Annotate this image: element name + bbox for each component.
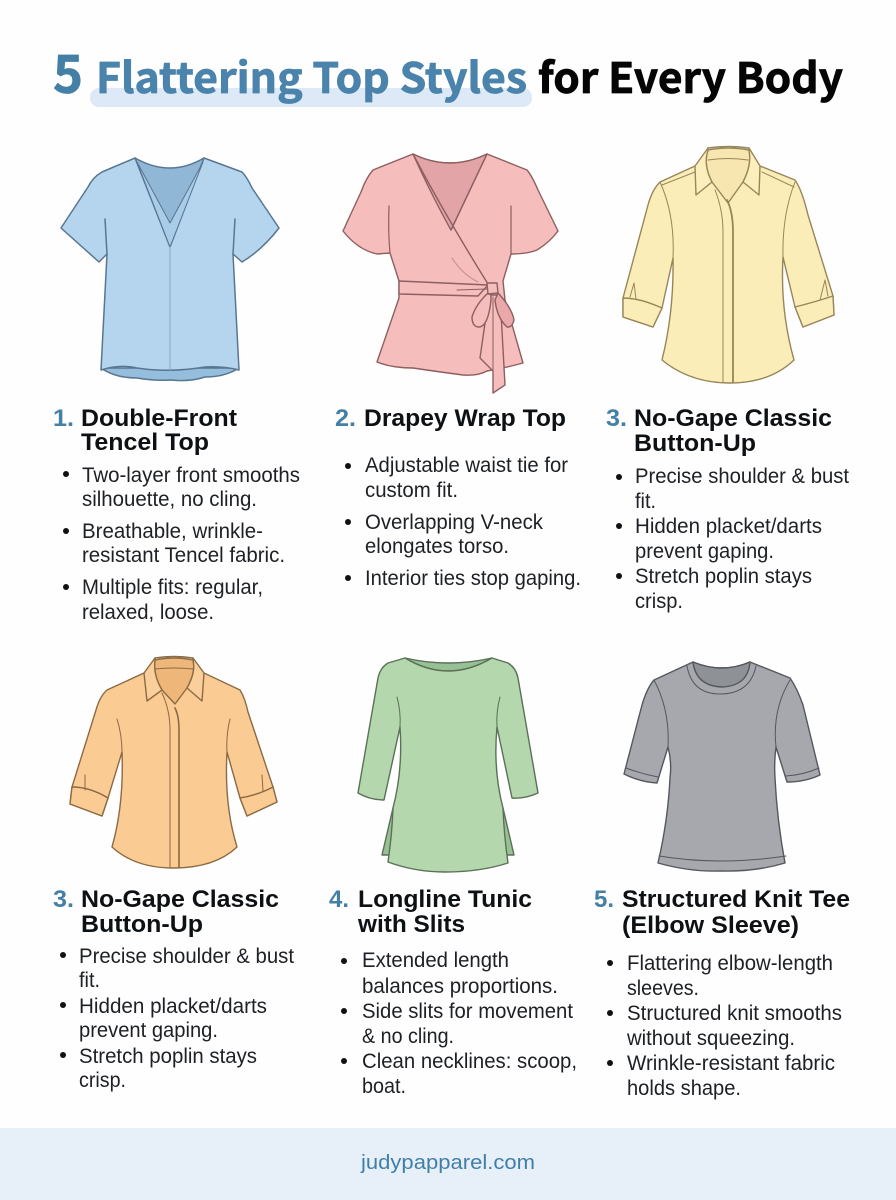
heading 4 [329,886,532,938]
bullet list 3 repeat: Hidden placket/darts [79,995,267,1018]
bullet list 2: Overlapping V-neck [365,511,543,534]
bullet list 4: balances proportions. [362,975,558,998]
bullet list 1 [63,464,300,624]
bullet list 5 [607,952,842,1100]
bullet list 2: Interior ties stop gaping. [365,567,581,590]
bullet list 4: boat. [362,1075,406,1098]
heading 1: Double-Front [81,405,237,432]
title black text: for Every Body [538,45,843,106]
heading 5: (Elbow Sleeve) [622,912,799,939]
bullet list 5: Wrinkle-resistant fabric [627,1052,835,1075]
bullet list 3: crisp. [635,590,683,613]
title number: 5 [53,33,83,109]
bullet list 2 [345,454,581,590]
bullet list 3 repeat: Stretch poplin stays [79,1045,257,1068]
title [53,33,843,109]
illustration: orange button-up shirt [70,656,277,868]
bullet list 1: resistant Tencel fabric. [82,544,285,567]
illustration: pink wrap top [343,154,558,393]
illustration: yellow button-up shirt [623,146,834,383]
heading 4: Longline Tunic [358,886,532,913]
heading 5: 5. [594,886,614,913]
bullet list 2: Adjustable waist tie for [365,454,568,477]
bullet list 1: Two-layer front smooths [82,464,300,487]
bullet list 3: Stretch poplin stays [635,565,812,588]
illustration: green tunic [358,658,538,872]
panel: longline tunic with slits [329,658,577,1098]
heading 3 repeat [53,886,279,938]
bullet list 4: Clean necklines: scoop, [362,1050,577,1073]
bullet list 3 repeat: fit. [79,969,100,992]
bullet list 3 repeat: Precise shoulder & bust [79,945,294,968]
bullet list 5: sleeves. [627,977,699,1000]
heading 2: 2. [335,405,356,432]
bullet list 3: Hidden placket/darts [635,515,822,538]
heading 3: 3. [606,405,627,432]
heading 3: Button-Up [634,430,756,457]
panel: structured knit tee [594,662,850,1100]
heading 2: Drapey Wrap Top [364,405,566,432]
illustration: blue v-neck top [61,158,279,381]
bullet list 1: Breathable, wrinkle- [82,520,263,543]
bullet list 4 [341,949,577,1098]
panel: double-front tencel top [53,158,300,624]
footer band [0,1128,896,1200]
bullet list 3: Precise shoulder & bust [635,465,849,488]
panel: no-gape classic button-up (bottom row) [53,656,294,1092]
heading 4: with Slits [357,911,465,938]
bullet list 5: without squeezing. [626,1027,795,1050]
bullet list 5: holds shape. [627,1077,741,1100]
bullet list 1: Multiple fits: regular, [82,576,263,599]
bullet list 3: fit. [635,490,656,513]
bullet list 4: Extended length [362,949,509,972]
bullet list 5: Flattering elbow-length [627,952,833,975]
heading 3 [606,405,832,457]
bullet list 2: custom fit. [365,479,458,502]
bullet list 3 repeat: prevent gaping. [79,1019,218,1042]
bullet list 1: silhouette, no cling. [82,488,257,511]
heading 1: Tencel Top [81,429,209,456]
bullet list 4: Side slits for movement [362,1000,573,1023]
heading 3 repeat: 3. [53,886,74,913]
heading 5: Structured Knit Tee [622,886,850,913]
bullet list 2: elongates torso. [365,535,509,558]
heading 1: 1. [53,405,74,432]
bullet list 3: prevent gaping. [635,540,774,563]
bullet list 3 repeat: crisp. [79,1069,126,1092]
heading 3: No-Gape Classic [634,405,832,432]
heading 1 [53,405,237,456]
bullet list 1: relaxed, loose. [82,601,214,624]
bullet list 3 repeat [60,945,294,1092]
illustration: gray knit tee [624,662,820,871]
footer url: judypapparel.com [360,1152,535,1174]
panel: drapey wrap top [335,154,581,590]
heading 5 [594,886,850,939]
title blue text: Flattering Top Styles [96,45,527,106]
panel: no-gape classic button-up (top row) [606,146,849,613]
heading 3 repeat: No-Gape Classic [81,886,279,913]
heading 4: 4. [329,886,349,913]
bullet list 5: Structured knit smooths [627,1002,842,1025]
title highlight [90,88,532,107]
bullet list 4: & no cling. [362,1025,454,1048]
heading 3 repeat: Button-Up [81,911,203,938]
bullet list 3 [616,465,849,613]
